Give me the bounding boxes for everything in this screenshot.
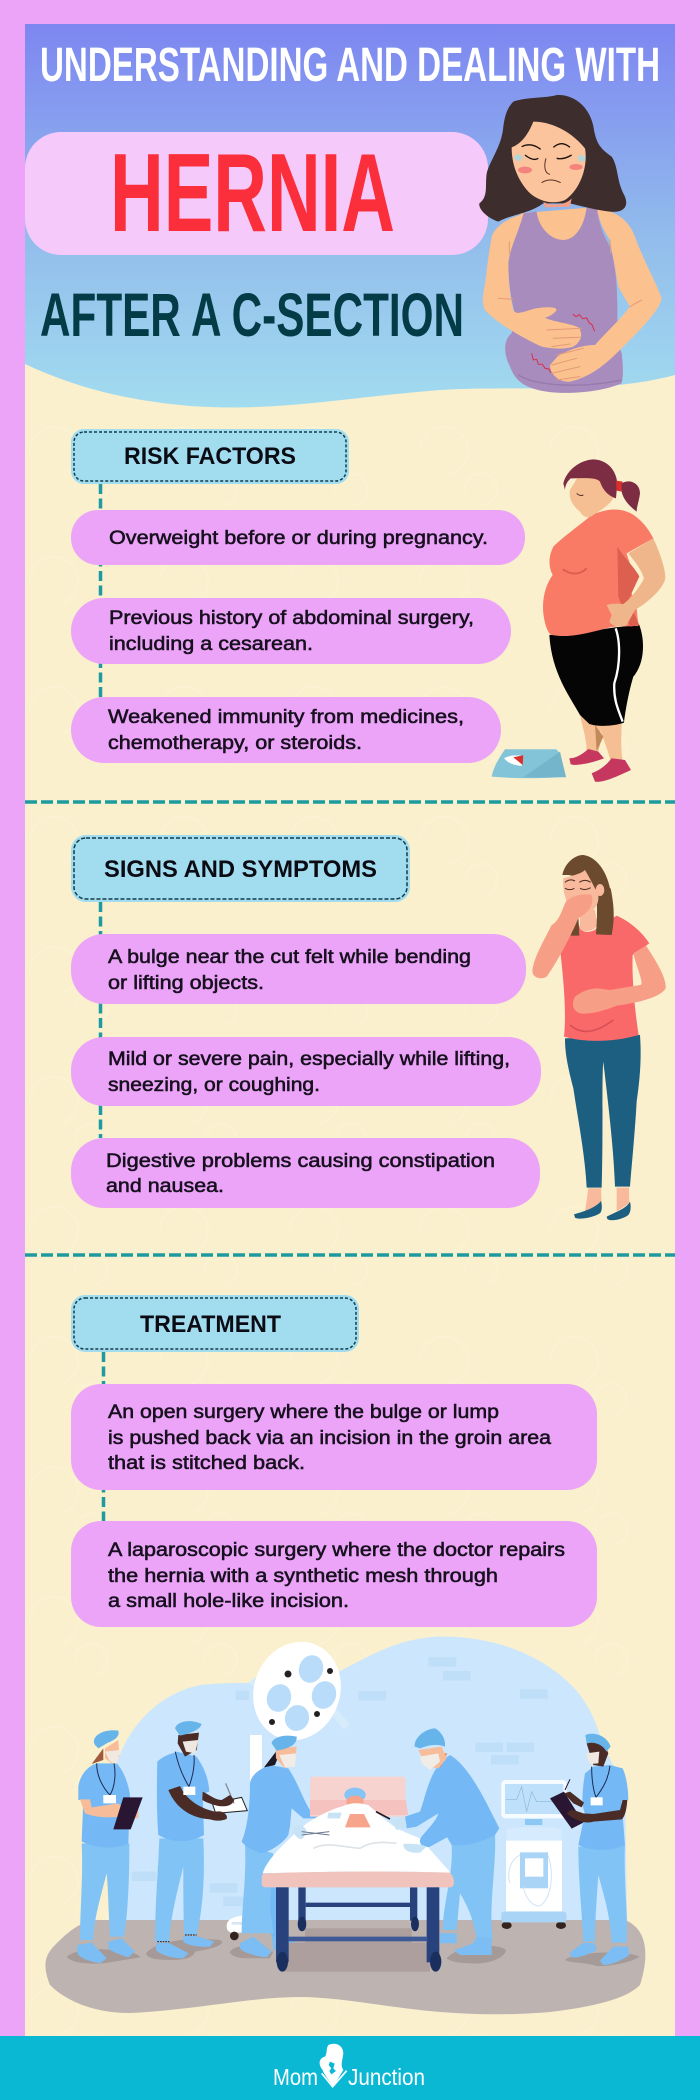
- risk item 2: including a cesarean.: [109, 633, 313, 655]
- surgical team member 5: [550, 1734, 639, 1966]
- cream background panel: [25, 300, 675, 2040]
- monitor cart: [501, 1780, 567, 1929]
- illustration: woman holding abdomen: [479, 95, 662, 393]
- surgical team member 3: [230, 1736, 327, 1958]
- section: risk factors: [71, 429, 525, 763]
- section: treatment: [71, 1295, 597, 1627]
- symptom item 1: or lifting objects.: [108, 972, 264, 994]
- heading: treatment: TREATMENT: [140, 1311, 281, 1338]
- surgical team member 2: [146, 1721, 247, 1960]
- section: signs and symptoms: [71, 835, 541, 1208]
- risk item 3: chemotherapy, or steroids.: [108, 732, 362, 754]
- right figures layer: [262, 1728, 639, 1972]
- operating lamp: [239, 1629, 355, 1925]
- risk item 1: [71, 510, 525, 565]
- heading: risk factors: [71, 429, 349, 484]
- connector line: [99, 484, 102, 697]
- section divider: [25, 800, 675, 804]
- logo: MomJunction: Junction: [348, 2064, 425, 2090]
- heading: risk factors: RISK FACTORS: [124, 443, 296, 470]
- risk item 3: [71, 697, 501, 763]
- symptom item 1: [71, 934, 526, 1004]
- floor: [45, 1920, 645, 2014]
- illustration: surgery room: [45, 1629, 645, 2014]
- heading: signs and symptoms: SIGNS AND SYMPTOMS: [104, 856, 377, 883]
- symptom item 3: Digestive problems causing constipation: [106, 1150, 495, 1172]
- header sky background: [25, 24, 675, 407]
- left figures layer: [67, 1721, 327, 1964]
- patient bed and patient: [262, 1777, 454, 1972]
- treatment item 2: A laparoscopic surgery where the doctor repairs: [108, 1539, 565, 1561]
- symptom item 2: [71, 1037, 541, 1106]
- logo: MomJunction: Mom: [273, 2064, 318, 2090]
- symptom item 2: Mild or severe pain, especially while lifting,: [108, 1048, 510, 1070]
- symptom item 2: sneezing, or coughing.: [108, 1074, 320, 1096]
- connector line: [99, 902, 102, 1138]
- footer band: [0, 2036, 700, 2100]
- risk item 3: Weakened immunity from medicines,: [108, 706, 464, 728]
- logo: MomJunction: [273, 2044, 425, 2090]
- treatment item 1: [71, 1384, 597, 1490]
- treatment item 1: is pushed back via an incision in the groin area: [108, 1427, 551, 1449]
- treatment item 1: that is stitched back.: [108, 1452, 305, 1474]
- room wall: [109, 1637, 627, 1922]
- heading: signs and symptoms: [71, 835, 410, 902]
- title pill: hernia: HERNIA: [110, 131, 395, 255]
- illustration: overweight woman with scale: [492, 459, 665, 782]
- symptom item 1: A bulge near the cut felt while bending: [108, 946, 471, 968]
- symptom item 3: [71, 1138, 540, 1208]
- gloved hands and forceps: [293, 1813, 448, 1853]
- symptom item 3: and nausea.: [106, 1175, 224, 1197]
- treatment item 2: the hernia with a synthetic mesh through: [108, 1565, 498, 1587]
- treatment item 1: An open surgery where the bulge or lump: [108, 1401, 499, 1423]
- section divider: [25, 1253, 675, 1257]
- connector line: [102, 1352, 105, 1521]
- subtitle: AFTER A C-SECTION: [40, 281, 464, 349]
- risk item 1: Overweight before or during pregnancy.: [109, 527, 488, 549]
- treatment item 2: a small hole-like incision.: [108, 1590, 349, 1612]
- treatment item 2: [71, 1521, 597, 1627]
- illustration: nauseous woman: [532, 855, 666, 1220]
- surgical team member 4: [405, 1728, 506, 1964]
- heading: treatment: [71, 1295, 359, 1352]
- risk item 2: [71, 598, 511, 664]
- risk item 2: Previous history of abdominal surgery,: [109, 607, 474, 629]
- surgical team member 1: [67, 1730, 143, 1964]
